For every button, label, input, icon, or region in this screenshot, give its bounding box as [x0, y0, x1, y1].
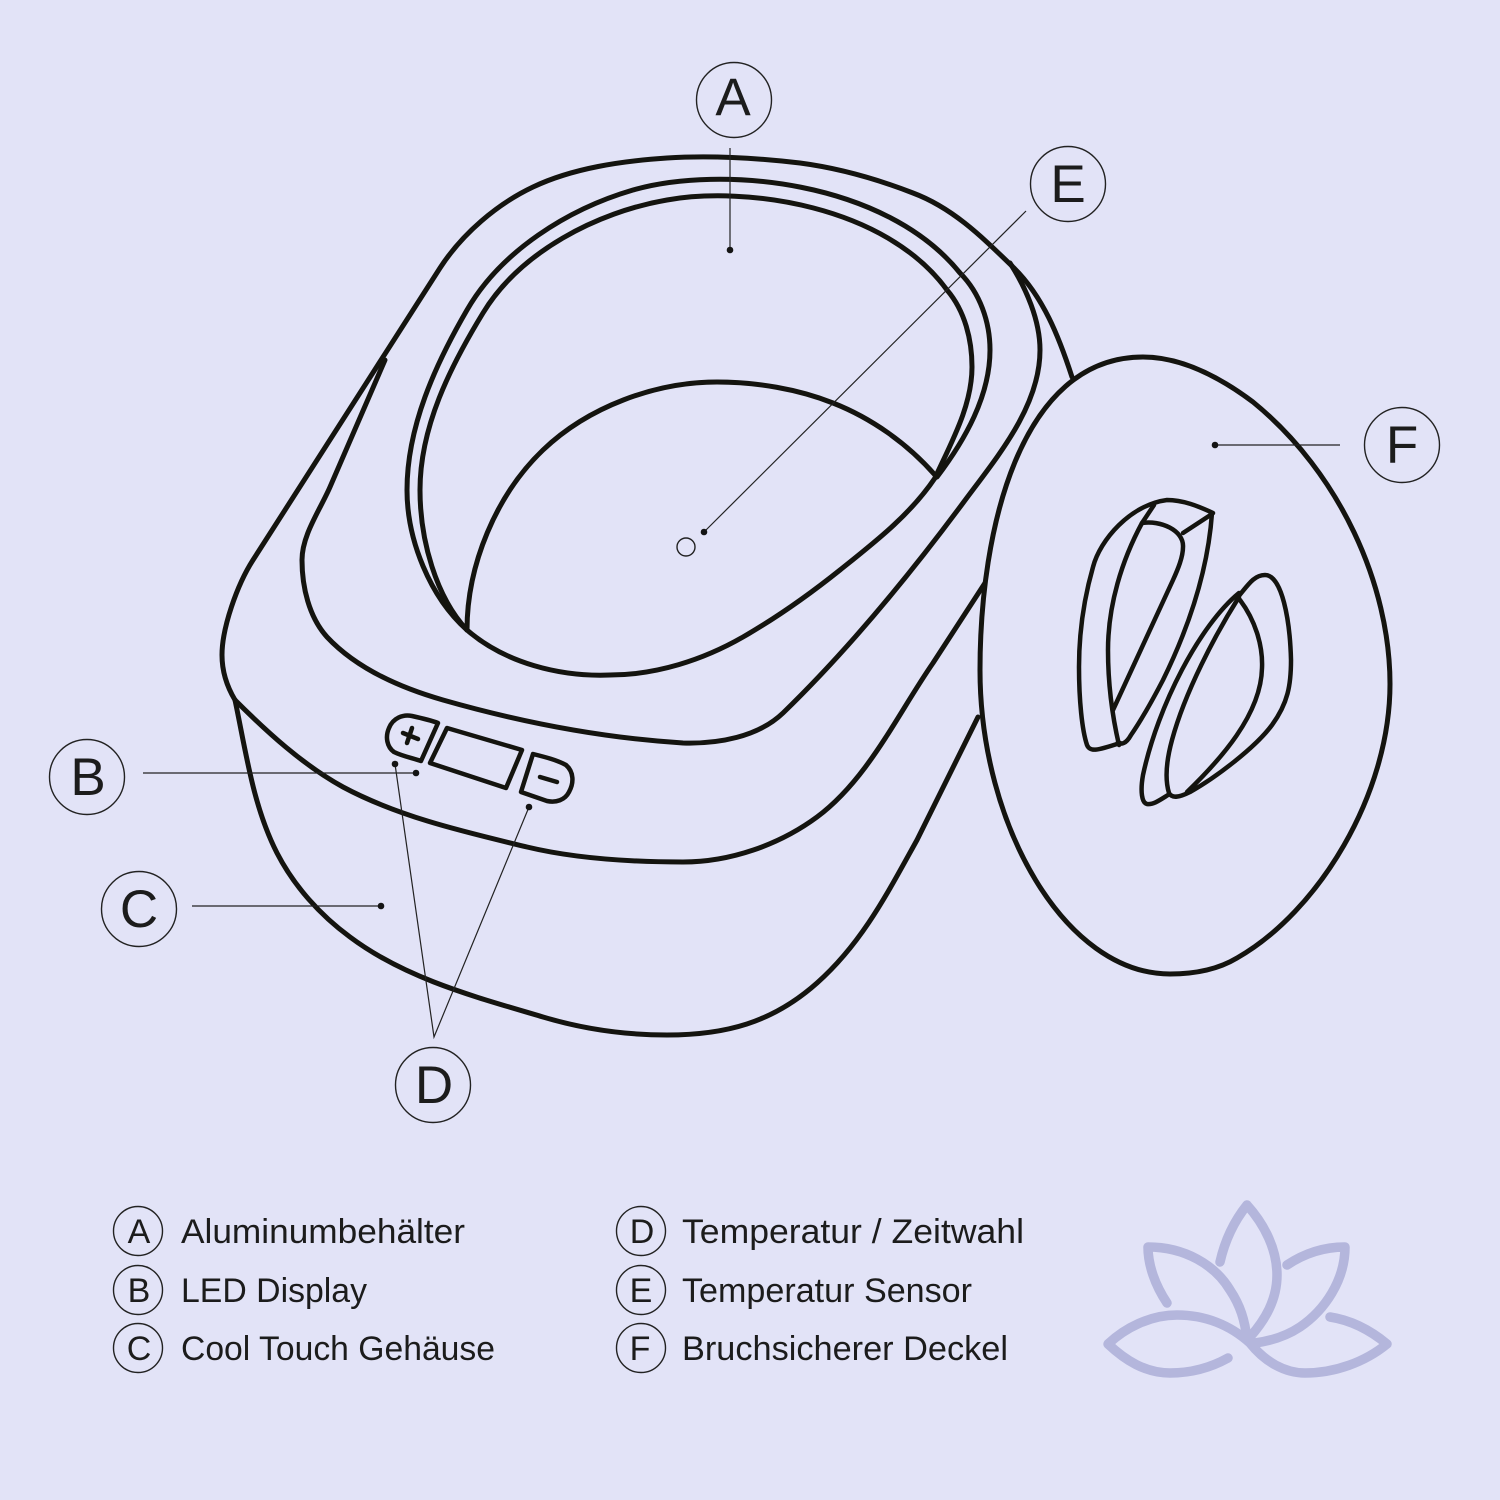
callout C: [102, 872, 384, 946]
lid right handle: [1142, 575, 1291, 804]
callout B: B: [70, 748, 106, 807]
legend item A: Aluminumbehälter: [181, 1213, 465, 1251]
icon: lotus logo: [1108, 1205, 1387, 1373]
callout E: E: [1050, 155, 1086, 214]
callout F: F: [1386, 416, 1418, 475]
legend item E: Temperatur Sensor: [682, 1272, 972, 1310]
illustration: paraffin bath device: [222, 157, 1072, 1035]
legend item C: [114, 1324, 495, 1372]
device rim lower edge: [235, 583, 985, 862]
callout A: A: [715, 68, 751, 127]
bowl inner ring: [420, 196, 972, 630]
device body outer rim: [222, 157, 1072, 700]
lid outline: [980, 357, 1390, 974]
LED display: [430, 728, 522, 788]
legend item B: LED Display: [181, 1272, 367, 1310]
legend item E: [616, 1266, 972, 1314]
bowl floor: [467, 382, 935, 630]
legend item D: Temperatur / Zeitwahl: [682, 1213, 1024, 1251]
legend item B: B: [128, 1272, 150, 1310]
callout B: [50, 740, 419, 814]
callout C: C: [120, 880, 158, 939]
legend item B: [114, 1266, 367, 1314]
legend item C: Cool Touch Gehäuse: [181, 1330, 495, 1368]
legend item F: Bruchsicherer Deckel: [682, 1330, 1008, 1368]
callout F: [1212, 408, 1440, 482]
legend: [114, 1206, 1024, 1372]
lid: [980, 357, 1390, 974]
callout A: [696, 62, 772, 253]
callout D: [392, 761, 532, 1122]
callout D: D: [415, 1056, 453, 1115]
lid left handle: [1079, 500, 1213, 750]
device raised top surface: [302, 263, 1040, 743]
legend item E: E: [630, 1272, 652, 1310]
legend item C: C: [127, 1330, 151, 1368]
legend item A: A: [128, 1213, 151, 1251]
bowl front rim: [467, 478, 935, 675]
legend item A: [114, 1206, 465, 1256]
legend item D: D: [630, 1213, 654, 1251]
legend item F: [616, 1324, 1008, 1372]
legend item F: F: [630, 1330, 650, 1368]
bowl outer ring: [407, 179, 990, 630]
minus button: [521, 754, 572, 802]
device lower housing: [235, 700, 978, 1035]
callout E: [677, 146, 1106, 556]
legend item D: [616, 1206, 1024, 1256]
plus button: [387, 716, 438, 761]
